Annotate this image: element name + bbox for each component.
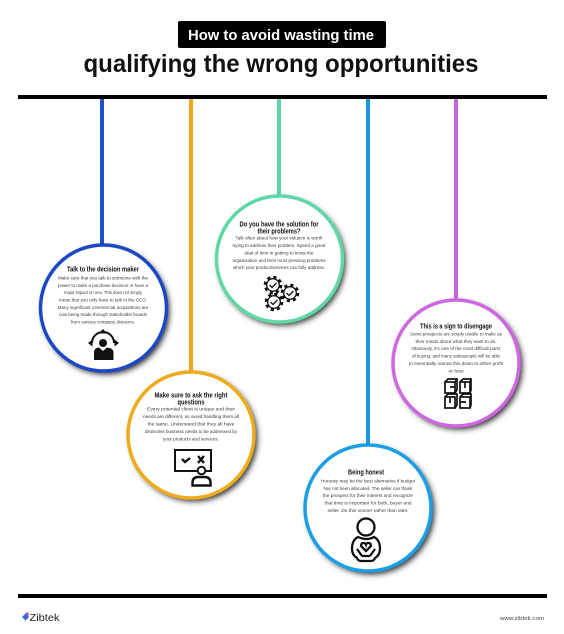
icon: board with person (175, 450, 211, 486)
icon: four boxes (445, 379, 471, 408)
text block: solution: organization and their most pressing problems (232, 258, 326, 264)
heading: solution for their problems: Do you have the solution for (240, 221, 319, 228)
text block: decision maker (58, 276, 149, 326)
text block: decision maker: power to make a purchase decision or have a (58, 283, 148, 289)
panel: talk to the decision maker (40, 245, 170, 374)
text block: solution: Talk often about how your solution is worth (236, 236, 323, 242)
panel: being honest (305, 445, 434, 574)
text block: decision maker: from various company divisions. (71, 320, 135, 326)
heading: being honest: Being honest (348, 469, 385, 476)
text block: solution: deal of time in getting to know the (244, 250, 314, 256)
text block: ask questions: your products and services. (163, 437, 219, 443)
text block: disengage: to essentially narrow this down to either profit (409, 361, 504, 367)
text block: honest: the prospect for their interest and recognize (323, 493, 413, 499)
heading: solution for their problems (240, 221, 319, 235)
text block: disengage: of buying, and many salespeople will be able (412, 354, 500, 360)
title badge: How to avoid wasting time (188, 27, 374, 44)
heading: talk to the decision maker: Talk to the decision maker (67, 266, 139, 273)
text block: ask questions: distinctive business needs to be addressed by (145, 429, 238, 435)
icon: person with heart (352, 518, 380, 561)
text block: ask questions: the same. Understand that they all have (148, 422, 235, 428)
logo: Zibtek (22, 612, 61, 624)
text block: honest (321, 479, 416, 514)
website url: www.zibtek.com (499, 616, 544, 622)
heading: solution for their problems: their problems? (258, 228, 300, 235)
text block: decision maker: Many significant commercial acquisitions are (58, 305, 149, 311)
panel: make sure to ask the right questions (128, 372, 258, 502)
icon: gears with check marks (266, 278, 298, 310)
text block: honest: seller. Do this sooner rather than later. (328, 508, 408, 514)
text block: solution (232, 236, 326, 271)
heading: ask the right questions: questions (178, 399, 205, 406)
text block: ask questions: Every potential client is unique and their (147, 407, 235, 413)
panel: this is a sign to disengage (393, 300, 522, 430)
text block: disengage (409, 332, 504, 374)
main title: qualifying the wrong opportunities (84, 50, 478, 78)
text block: ask questions: needs are different, so avoid handling them all (143, 414, 239, 420)
text block: disengage: or loss (448, 368, 464, 374)
logo: Zibtek: Zibtek (30, 613, 61, 624)
panel: do you have the solution (216, 196, 346, 326)
heading: sign to disengage: This is a sign to disengage (420, 323, 492, 330)
heading: ask the right questions: Make sure to ask the right (154, 392, 228, 399)
text block: ask questions (143, 407, 239, 443)
title badge (178, 21, 386, 48)
text block: solution: which your product/services can fully address. (233, 265, 325, 271)
icon: decision maker with arrows (88, 329, 119, 360)
text block: disengage: Some prospects are simply unable to make up (410, 332, 502, 338)
connector lines (100, 97, 458, 445)
heading: ask the right questions (154, 392, 228, 406)
text block: solution: trying to address their problem. Spend a great (232, 243, 326, 249)
text block: honest: has not been allocated. The seller can thank (324, 486, 413, 492)
bottom rule (18, 594, 547, 598)
text block: honest: Honesty may be the best alternative if budget (321, 479, 416, 485)
text block: decision maker: now being made through stakeholder boards (59, 312, 147, 318)
text block: disengage: Obviously, it's one of the most difficult parts (412, 346, 501, 352)
text block: honest: that time is important for both, buyer and (324, 500, 412, 506)
top rule (18, 95, 547, 99)
text block: decision maker: major impact on one. This does not simply (64, 290, 142, 296)
text block: decision maker: Make sure that you talk to someone with the (58, 276, 148, 282)
text block: decision maker: mean that you only have to talk to the CEO. (59, 297, 147, 303)
text block: disengage: their minds about what they want to do. (416, 339, 496, 345)
